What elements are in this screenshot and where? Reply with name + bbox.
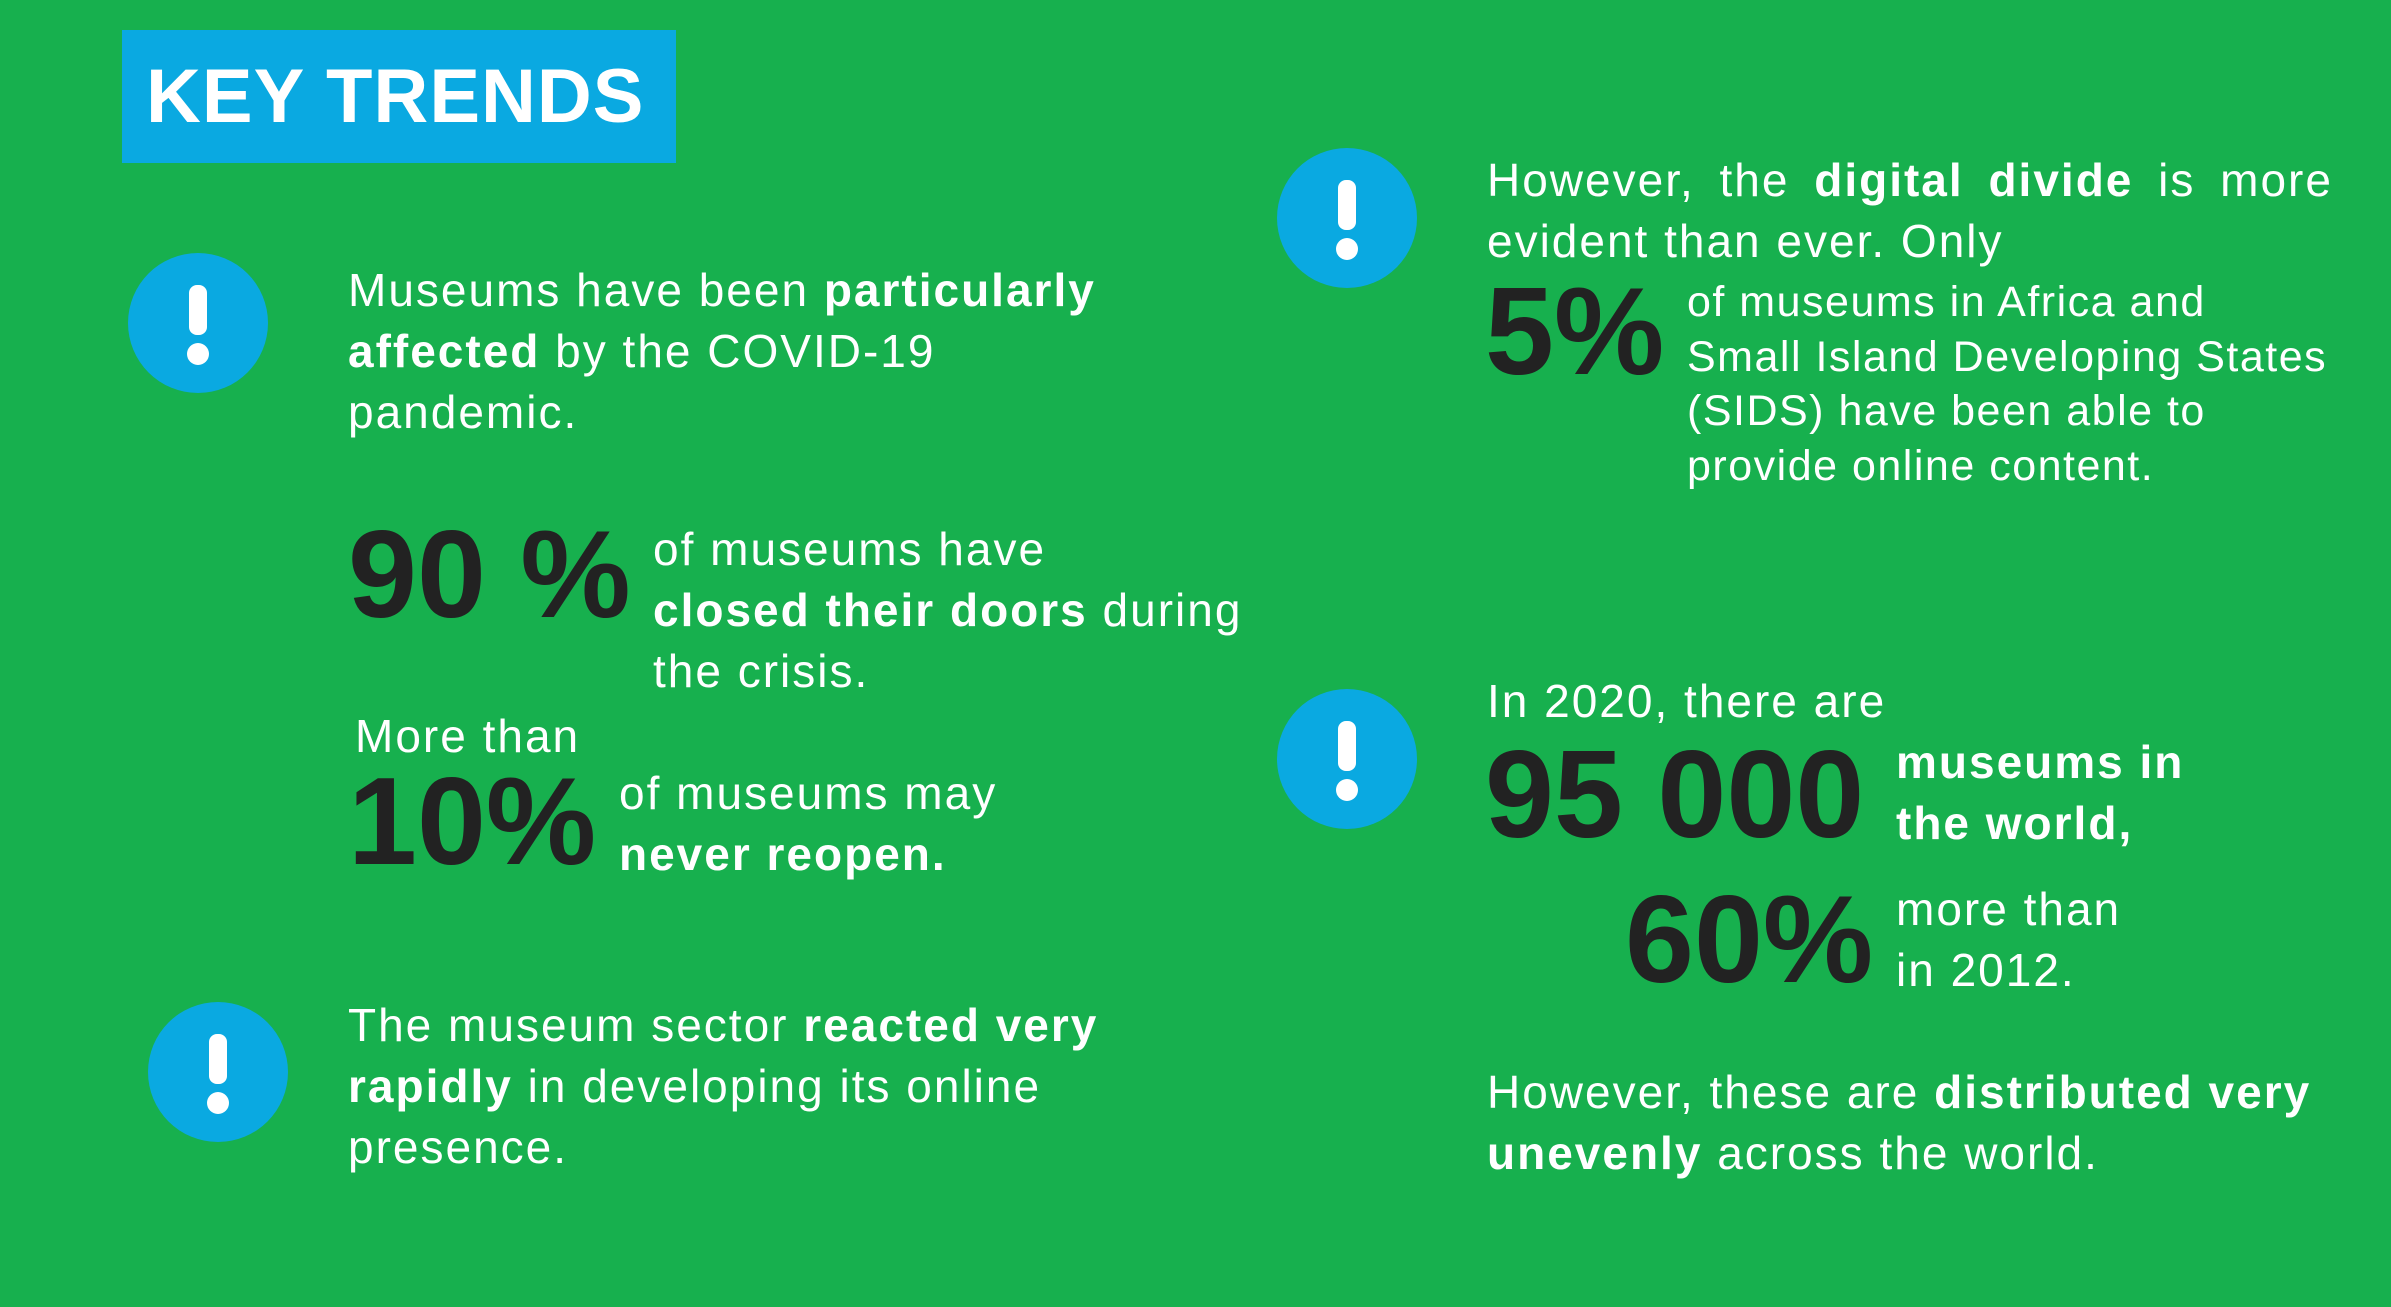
text: digital divide: divide <box>1988 154 2133 206</box>
text: museums in world: museums in <box>1896 736 2184 788</box>
text: reacted rapidly <box>348 999 1098 1173</box>
text: museums affected: Museums have been particularly <box>348 264 1096 316</box>
text: Africa SIDS: of museums in Africa and <box>1687 278 2206 326</box>
text: Africa SIDS: (SIDS) have been able to <box>1687 387 2206 435</box>
text: closed doors: closed their doors during <box>653 584 1242 636</box>
text: digital divide: the <box>1720 154 1789 206</box>
text: more than 2012 <box>1896 883 2121 996</box>
text: Africa SIDS: Small Island Developing States <box>1687 332 2327 380</box>
text: digital divide: evident than ever. Only <box>1487 215 2004 267</box>
stat: 60%: 60% <box>1625 871 1873 1009</box>
text: digital divide <box>1487 154 2333 267</box>
text: museums affected: pandemic. <box>348 386 578 438</box>
title: KEY TRENDS <box>146 54 644 139</box>
stat: 10%: 10% <box>348 753 596 891</box>
text: distributed unevenly: unevenly across the world. <box>1487 1127 2099 1179</box>
text: distributed unevenly <box>1487 1066 2311 1179</box>
text: never reopen <box>619 767 997 880</box>
icon: exclamation 3 <box>1277 148 1417 288</box>
text: closed doors: of museums have <box>653 523 1046 575</box>
text: digital divide: more <box>2220 154 2333 206</box>
text: Africa SIDS <box>1687 278 2327 490</box>
text: more than 2012: in 2012. <box>1896 944 2076 996</box>
text: museums affected: affected by the COVID-19 <box>348 325 935 377</box>
text: more than: More than <box>355 710 580 762</box>
text: never reopen: never reopen. <box>619 828 947 880</box>
text: more than 2012: more than <box>1896 883 2121 935</box>
text: reacted rapidly: presence. <box>348 1121 568 1173</box>
stat: 95 000: 95 000 <box>1485 726 1864 864</box>
text: closed doors <box>653 523 1242 697</box>
icon: exclamation 4 <box>1277 689 1417 829</box>
text: digital divide: However, <box>1487 154 1695 206</box>
text: never reopen: of museums may <box>619 767 997 819</box>
text: museums in world: the world, <box>1896 797 2133 849</box>
text: in 2020: In 2020, there are <box>1487 675 1886 727</box>
stat: 90%: 90 % <box>348 506 631 644</box>
title <box>122 30 676 163</box>
text: distributed unevenly: However, these are distributed very <box>1487 1066 2311 1118</box>
text: reacted rapidly: The museum sector reacted very <box>348 999 1098 1051</box>
text: Africa SIDS: provide online content. <box>1687 442 2154 490</box>
text: museums in world <box>1896 736 2184 849</box>
text: digital divide: digital <box>1814 154 1964 206</box>
icon: exclamation 1 <box>128 253 268 393</box>
text: closed doors: the crisis. <box>653 645 869 697</box>
stat: 5%: 5% <box>1485 263 1664 401</box>
icon: exclamation 2 <box>148 1002 288 1142</box>
text: digital divide: is <box>2158 154 2195 206</box>
text: reacted rapidly: rapidly in developing its online <box>348 1060 1041 1112</box>
text: museums affected <box>348 264 1096 438</box>
